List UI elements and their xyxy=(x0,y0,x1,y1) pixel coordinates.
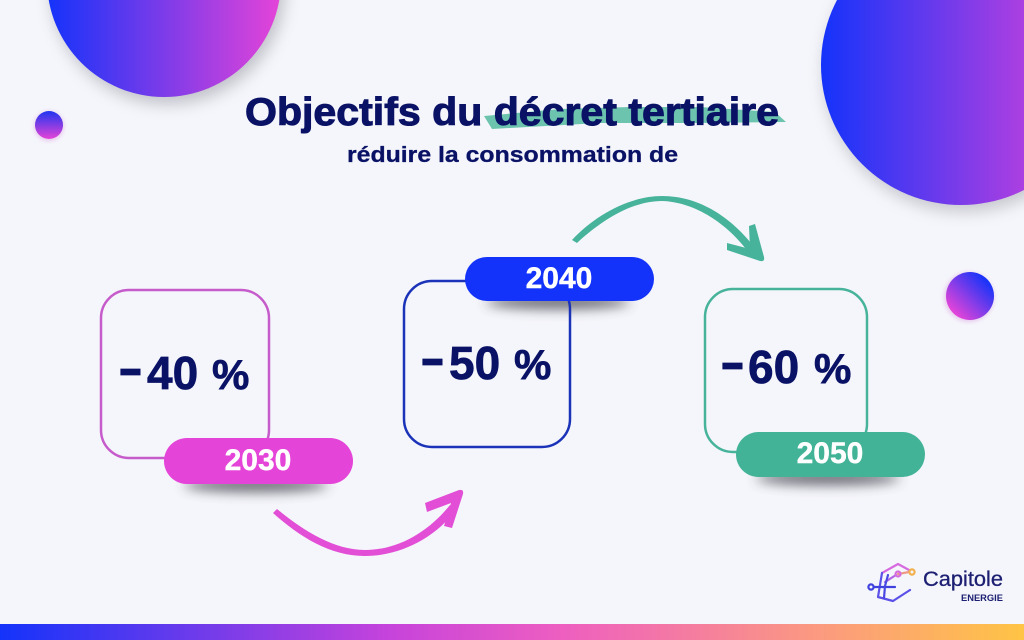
value: % xyxy=(814,345,851,392)
value: % xyxy=(212,351,249,398)
value: % xyxy=(514,341,551,388)
arrow: 2030 to 2040 xyxy=(273,490,463,556)
pill shadow xyxy=(756,471,900,485)
title block xyxy=(245,91,786,167)
bottom gradient bar xyxy=(0,624,1024,640)
value xyxy=(420,330,551,389)
subtitle: réduire la consommation de xyxy=(347,142,678,167)
logo: Capitole Energie xyxy=(868,564,1003,603)
value xyxy=(118,340,249,399)
year: 2030 xyxy=(225,444,291,477)
value: - xyxy=(720,334,745,390)
pill shadow xyxy=(486,295,630,309)
pill xyxy=(164,438,353,484)
year: 2040 xyxy=(526,262,592,295)
pill xyxy=(736,432,925,477)
value xyxy=(720,334,851,393)
card: 2040 xyxy=(404,257,654,447)
year: 2050 xyxy=(797,437,863,470)
pill shadow xyxy=(184,478,328,492)
decorative circle: small left xyxy=(34,111,64,141)
value: 40 xyxy=(147,347,211,399)
pill xyxy=(465,257,654,301)
title: Objectifs du décret tertiaire xyxy=(245,91,779,134)
logo icon xyxy=(868,564,915,601)
logo name: Capitole xyxy=(923,568,1003,591)
box xyxy=(404,281,570,447)
decorative circle: small right xyxy=(944,272,994,322)
logo tagline: ENERGIE xyxy=(961,593,1003,603)
box xyxy=(705,289,867,452)
value: 60 xyxy=(748,341,812,393)
box xyxy=(101,290,269,458)
highlight brush stroke xyxy=(484,107,786,129)
card: 2050 xyxy=(705,289,925,485)
value: - xyxy=(420,330,445,386)
decorative circle: top left xyxy=(47,0,285,104)
value: 50 xyxy=(449,337,513,389)
card: 2030 xyxy=(101,290,353,492)
decorative circle: top right xyxy=(821,0,1024,212)
value: - xyxy=(118,340,143,396)
arrow: 2040 to 2050 xyxy=(572,196,764,261)
